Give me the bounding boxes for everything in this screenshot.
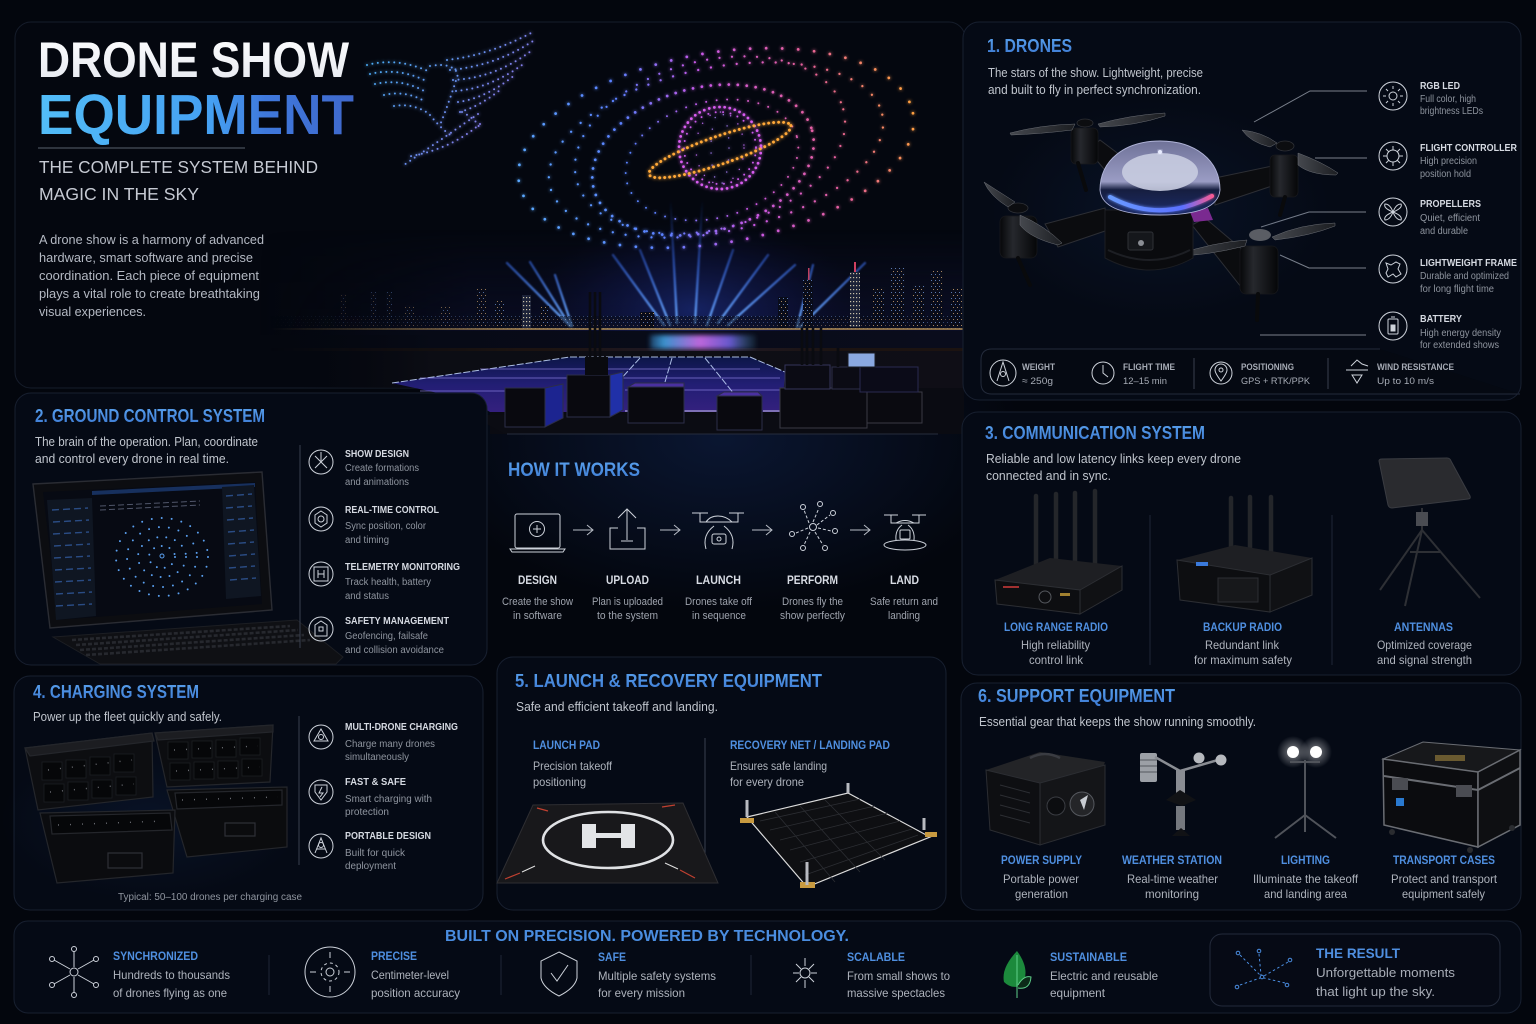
- item: show design: Create formations: [345, 463, 419, 474]
- step: launch: [685, 513, 753, 622]
- recovery net text: Ensures safe landing: [730, 759, 827, 773]
- icon: portable design: [309, 834, 333, 858]
- item: telemetry monitoring: [345, 562, 460, 602]
- step: launch: in sequence: [692, 610, 746, 622]
- item: multi-drone charging: [345, 722, 458, 763]
- item: safety management: and collision avoidance: [345, 645, 444, 656]
- benefit: precise: position accuracy: [371, 986, 460, 1000]
- description: The stars of the show. Lightweight, precise: [988, 66, 1203, 80]
- sky drone formation: bird: [367, 32, 533, 165]
- intro paragraph: coordination. Each piece of equipment: [39, 268, 259, 283]
- step: design: Create the show: [502, 596, 573, 608]
- description: [986, 452, 1241, 483]
- arrow: [660, 525, 680, 535]
- benefit: sustainable: SUSTAINABLE: [1050, 952, 1127, 964]
- spec: positioning: [1241, 362, 1311, 387]
- section: how it works: [502, 460, 938, 622]
- power supply label: [1001, 855, 1082, 901]
- arrow: [850, 525, 870, 535]
- icon: show design: [309, 450, 333, 474]
- callout: RGB LED: Full color, high: [1420, 94, 1476, 105]
- item: real-time control: [345, 505, 439, 546]
- motors: [1000, 128, 1298, 294]
- antennas label: Optimized coverage: [1377, 638, 1472, 652]
- step: upload: [592, 509, 663, 622]
- benefit: precise: [371, 951, 460, 1000]
- transport cases label: Protect and transport: [1391, 872, 1498, 886]
- benefit: precise: PRECISE: [371, 951, 417, 963]
- spec bar: [981, 349, 1520, 394]
- spec: weight: WEIGHT: [1022, 362, 1055, 373]
- description: Essential gear that keeps the show running smoothly.: [979, 715, 1256, 729]
- icon: clock: [1092, 362, 1114, 384]
- heading: 6. SUPPORT EQUIPMENT: [978, 686, 1175, 706]
- callout: propellers: and durable: [1420, 226, 1468, 237]
- icon: real-time control: [309, 507, 333, 531]
- item: portable design: Built for quick: [345, 848, 406, 859]
- item: safety management: Geofencing, failsafe: [345, 631, 428, 642]
- step: perform: [780, 502, 845, 622]
- heading: 3. COMMUNICATION SYSTEM: [985, 423, 1205, 443]
- spec: wind resistance: WIND RESISTANCE: [1377, 362, 1454, 373]
- arrow: [573, 525, 593, 535]
- item: portable design: deployment: [345, 861, 396, 872]
- panel: 1. drones: [963, 22, 1521, 400]
- description: Power up the fleet quickly and safely.: [33, 710, 222, 724]
- benefit: sustainable: equipment: [1050, 986, 1106, 1000]
- launch pad illustration: [497, 803, 718, 883]
- recovery net text: RECOVERY NET / LANDING PAD: [730, 740, 890, 752]
- backup radio illustration: [1177, 497, 1312, 612]
- panel: hero with title and sky show: [15, 22, 965, 400]
- weather station label: Real-time weather: [1127, 872, 1218, 886]
- step: launch: LAUNCH: [696, 575, 741, 587]
- icon: safety management: [309, 617, 333, 641]
- item: show design: [345, 449, 419, 488]
- item: safety management: SAFETY MANAGEMENT: [345, 616, 449, 627]
- icon: lightweight frame: [1379, 255, 1407, 283]
- footnote: Typical: 50–100 drones per charging case: [118, 892, 302, 903]
- spec: flight time: 12–15 min: [1123, 376, 1167, 387]
- sky drone formation: planet: [645, 107, 795, 189]
- description: and control every drone in real time.: [35, 452, 229, 466]
- item: fast and safe: Smart charging with: [345, 794, 432, 805]
- lighting label: Illuminate the takeoff: [1253, 872, 1359, 886]
- icon: scalable: [793, 958, 817, 988]
- icon: shield: [541, 952, 577, 996]
- item: fast and safe: [345, 777, 432, 818]
- drone body: [1105, 210, 1193, 270]
- item: real-time control: Sync position, color: [345, 521, 427, 532]
- icon: leaf: [1004, 951, 1031, 998]
- item: multi-drone charging: MULTI-DRONE CHARGING: [345, 722, 458, 733]
- drone illustration: [984, 100, 1338, 320]
- antenna illustration: [1379, 458, 1480, 606]
- item: telemetry monitoring: TELEMETRY MONITORING: [345, 562, 460, 573]
- sky drone formation: galaxy rings: [503, 20, 929, 276]
- item: multi-drone charging: simultaneously: [345, 752, 409, 763]
- subtitle: THE COMPLETE SYSTEM BEHIND: [39, 157, 318, 177]
- callout: RGB LED: [1420, 81, 1483, 117]
- step: land: landing: [888, 610, 920, 622]
- laptop illustration: [33, 472, 343, 664]
- step: land: LAND: [890, 575, 919, 587]
- description: Safe and efficient takeoff and landing.: [516, 700, 718, 714]
- callout: lightweight frame: LIGHTWEIGHT FRAME: [1420, 258, 1517, 269]
- recovery net illustration: [740, 783, 937, 888]
- title: DRONE SHOW: [38, 32, 350, 88]
- transport cases label: equipment safely: [1402, 887, 1485, 901]
- icon: propellers: [1379, 198, 1407, 226]
- callout: flight controller: FLIGHT CONTROLLER: [1420, 143, 1518, 154]
- subtitle: MAGIC IN THE SKY: [39, 184, 199, 204]
- title: [38, 32, 354, 147]
- transport cases label: TRANSPORT CASES: [1393, 855, 1495, 867]
- icon: location pin: [1210, 362, 1232, 384]
- benefit: synchronized: [113, 951, 230, 1000]
- icon: fast and safe: [309, 780, 333, 804]
- power supply label: generation: [1015, 887, 1068, 901]
- step: perform: Drones fly the: [782, 596, 843, 608]
- launch pad text: Precision takeoff: [533, 759, 613, 773]
- panel: 3. communication system: [962, 412, 1521, 675]
- charging cases illustration: [0, 725, 300, 900]
- backup radio label: [1194, 622, 1292, 667]
- benefit: safe: SAFE: [598, 952, 626, 964]
- item: portable design: [345, 831, 431, 872]
- lighting label: LIGHTING: [1281, 855, 1330, 867]
- benefit: scalable: massive spectacles: [847, 986, 945, 1000]
- benefit: safe: for every mission: [598, 986, 685, 1000]
- arrow: [752, 525, 772, 535]
- callout: battery: for extended shows: [1420, 340, 1499, 351]
- long range radio label: High reliability: [1021, 638, 1090, 652]
- item: telemetry monitoring: and status: [345, 591, 389, 602]
- night sky glow: [404, 270, 962, 331]
- callout: lightweight frame: Durable and optimized: [1420, 271, 1509, 282]
- long range radio label: [1004, 622, 1108, 667]
- benefit: safe: Multiple safety systems: [598, 969, 716, 983]
- heading: 1. DRONES: [987, 36, 1072, 56]
- water and reflection: [260, 331, 964, 349]
- benefit: scalable: From small shows to: [847, 969, 950, 983]
- spec: flight time: [1123, 362, 1175, 387]
- subtitle: [39, 157, 318, 204]
- spec: weight: [1022, 362, 1055, 387]
- icon: telemetry: [309, 562, 333, 586]
- icon: weight: [990, 360, 1016, 386]
- weather station label: monitoring: [1145, 887, 1199, 901]
- benefit: synchronized: Hundreds to thousands: [113, 968, 230, 982]
- item: telemetry monitoring: Track health, battery: [345, 577, 431, 588]
- icon: wind: [1346, 360, 1368, 383]
- item: multi-drone charging: Charge many drones: [345, 739, 435, 750]
- skyline: [262, 262, 964, 351]
- step: launch: Drones take off: [685, 596, 753, 608]
- description: connected and in sync.: [986, 469, 1111, 483]
- intro paragraph: [39, 232, 264, 319]
- icon: precise: [305, 947, 355, 997]
- transport cases label: [1391, 855, 1498, 901]
- benefit: precise: Centimeter-level: [371, 968, 449, 982]
- intro paragraph: A drone show is a harmony of advanced: [39, 232, 264, 247]
- spec: wind resistance: [1377, 362, 1454, 387]
- panel: 2. ground control system: [15, 393, 487, 665]
- launch pad text: [533, 740, 613, 789]
- dome with LED ring: [1100, 141, 1220, 215]
- callout: the result: [1210, 934, 1500, 1006]
- result text: Unforgettable moments: [1316, 965, 1456, 980]
- spec: flight time: FLIGHT TIME: [1123, 362, 1175, 373]
- arms: [1045, 140, 1272, 292]
- antennas label: [1377, 622, 1472, 667]
- recovery net text: [730, 740, 890, 789]
- callout: RGB LED: RGB LED: [1420, 81, 1460, 92]
- description: The brain of the operation. Plan, coordinate: [35, 435, 258, 449]
- benefit: synchronized: of drones flying as one: [113, 986, 227, 1000]
- step: upload: Plan is uploaded: [592, 596, 663, 608]
- icon: RGB LED: [1379, 82, 1407, 110]
- spec: wind resistance: Up to 10 m/s: [1377, 376, 1434, 387]
- result text: that light up the sky.: [1316, 984, 1435, 999]
- benefit: synchronized: SYNCHRONIZED: [113, 951, 198, 963]
- intro paragraph: plays a vital role to create breathtaking: [39, 286, 260, 301]
- weather station label: [1122, 855, 1222, 901]
- icon: flight controller: [1379, 142, 1407, 170]
- lighting label: [1253, 855, 1359, 901]
- power supply label: POWER SUPPLY: [1001, 855, 1082, 867]
- icon: constellation: [1235, 949, 1292, 989]
- benefit: sustainable: [1050, 952, 1158, 1000]
- long range radio label: control link: [1029, 653, 1084, 667]
- lighting label: and landing area: [1264, 887, 1347, 901]
- heading: 4. CHARGING SYSTEM: [33, 682, 199, 702]
- launch site with equipment: [392, 292, 922, 434]
- description: Reliable and low latency links keep every drone: [986, 452, 1241, 466]
- result text: THE RESULT: [1316, 945, 1400, 961]
- weather station label: WEATHER STATION: [1122, 855, 1222, 867]
- description: [988, 66, 1203, 97]
- callout: flight controller: position hold: [1420, 169, 1471, 180]
- power supply label: Portable power: [1003, 872, 1079, 886]
- benefit: scalable: SCALABLE: [847, 952, 905, 964]
- callout lines: [1254, 91, 1367, 335]
- step: upload: UPLOAD: [606, 575, 649, 587]
- backup radio label: Redundant link: [1205, 638, 1280, 652]
- callout: lightweight frame: for long flight time: [1420, 284, 1494, 295]
- panel: 4. charging system: [0, 676, 483, 910]
- item: real-time control: and timing: [345, 535, 389, 546]
- heading: HOW IT WORKS: [508, 460, 640, 481]
- item: real-time control: REAL-TIME CONTROL: [345, 505, 439, 516]
- step: perform: PERFORM: [787, 575, 838, 587]
- lighting illustration: [1275, 736, 1336, 838]
- power supply illustration: [986, 752, 1105, 845]
- light beams: [507, 190, 865, 327]
- panel: bottom benefits bar: [14, 921, 1521, 1013]
- heading: 5. LAUNCH & RECOVERY EQUIPMENT: [515, 671, 822, 691]
- step: design: [502, 514, 573, 622]
- intro paragraph: visual experiences.: [39, 304, 146, 319]
- step: land: Safe return and: [870, 596, 938, 608]
- long range radio illustration: [995, 491, 1122, 614]
- step: design: DESIGN: [518, 575, 557, 587]
- heading: BUILT ON PRECISION. POWERED BY TECHNOLOGY.: [445, 928, 849, 945]
- description: [35, 435, 258, 466]
- spec: positioning: POSITIONING: [1241, 362, 1294, 373]
- item: safety management: [345, 616, 449, 656]
- item: show design: SHOW DESIGN: [345, 449, 409, 460]
- title: EQUIPMENT: [38, 83, 354, 147]
- launch pad text: LAUNCH PAD: [533, 740, 600, 752]
- backup radio label: BACKUP RADIO: [1203, 622, 1282, 634]
- ground: [300, 351, 964, 388]
- callout: propellers: [1420, 199, 1481, 237]
- callout: battery: BATTERY: [1420, 314, 1462, 325]
- item: show design: and animations: [345, 477, 409, 488]
- spec: weight: ≈ 250g: [1022, 376, 1053, 387]
- icon: synchronized: [50, 946, 98, 998]
- panel: 5. launch and recovery equipment: [497, 657, 946, 910]
- callout: flight controller: [1420, 143, 1518, 180]
- transport case illustration: [1383, 742, 1520, 853]
- spec: positioning: GPS + RTK/PPK: [1241, 376, 1311, 387]
- benefit: safe: [598, 952, 716, 1000]
- antennas label: and signal strength: [1377, 653, 1472, 667]
- description: and built to fly in perfect synchronization.: [988, 83, 1201, 97]
- item: fast and safe: protection: [345, 807, 389, 818]
- benefit: sustainable: Electric and reusable: [1050, 969, 1158, 983]
- intro paragraph: hardware, smart software and precise: [39, 250, 253, 265]
- result text: [1316, 945, 1456, 999]
- callout: lightweight frame: [1420, 258, 1517, 295]
- callout: propellers: PROPELLERS: [1420, 199, 1481, 210]
- panel: 6. support equipment: [961, 683, 1521, 910]
- step: land: [870, 515, 938, 622]
- step: perform: show perfectly: [780, 610, 845, 622]
- propellers: [984, 113, 1338, 256]
- benefit: scalable: [847, 952, 950, 1000]
- antennas label: ANTENNAS: [1394, 622, 1453, 634]
- backup radio label: for maximum safety: [1194, 653, 1292, 667]
- callout: flight controller: High precision: [1420, 156, 1477, 167]
- item: portable design: PORTABLE DESIGN: [345, 831, 431, 842]
- step: design: in software: [513, 610, 562, 622]
- long range radio label: LONG RANGE RADIO: [1004, 622, 1108, 634]
- icon: multi-drone charging: [309, 725, 333, 749]
- item: fast and safe: FAST & SAFE: [345, 777, 406, 788]
- recovery net text: for every drone: [730, 775, 804, 789]
- step: upload: to the system: [597, 610, 658, 622]
- callout: battery: High energy density: [1420, 328, 1501, 339]
- heading: 2. GROUND CONTROL SYSTEM: [35, 406, 265, 426]
- weather station illustration: [1140, 752, 1226, 836]
- launch pad text: positioning: [533, 775, 586, 789]
- callout: RGB LED: brightness LEDs: [1420, 106, 1483, 117]
- icon: battery: [1379, 312, 1407, 340]
- equipment cases: [505, 365, 922, 430]
- callout: battery: [1420, 314, 1501, 351]
- callout: propellers: Quiet, efficient: [1420, 213, 1480, 224]
